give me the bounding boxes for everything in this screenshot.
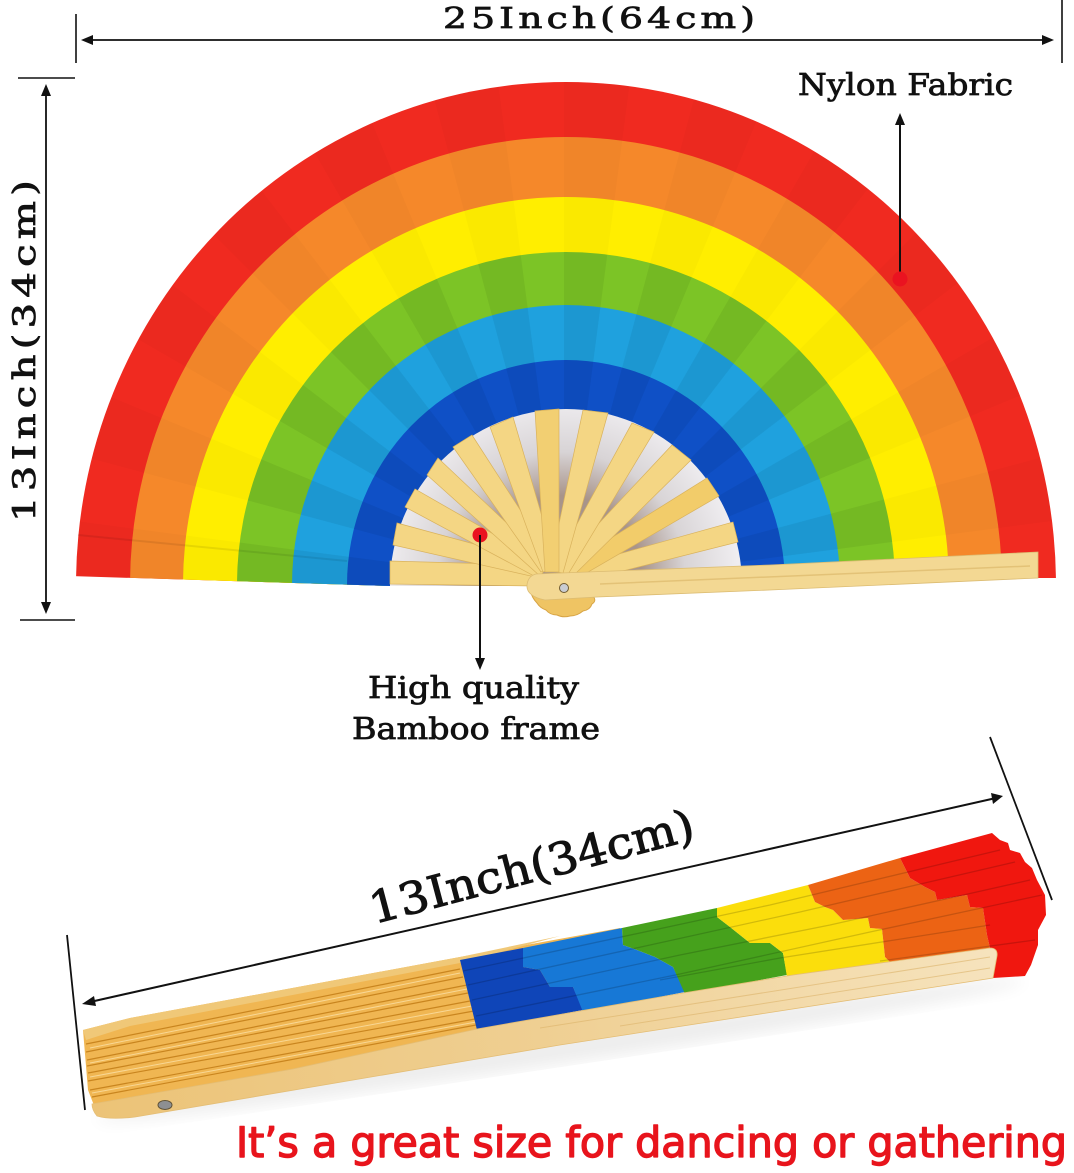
fabric: dark blue: [460, 948, 583, 1030]
dimension: width 25 inch: [76, 0, 1062, 63]
stacked sticks: [83, 928, 620, 1108]
fan fabric rainbow bands: [76, 82, 1056, 586]
fabric: blue: [523, 928, 685, 1012]
callout: nylon fabric: [798, 68, 1013, 286]
dimension: closed length 13 inch: 13Inch(34cm): [364, 800, 700, 935]
hub scalloped end: [530, 590, 595, 617]
rivet: [158, 1100, 172, 1110]
closed rainbow fan: [83, 833, 1046, 1133]
bamboo ribs: [390, 409, 738, 586]
fabric: orange: [808, 858, 990, 962]
fabric: yellow: [717, 885, 890, 977]
fabric: green: [622, 908, 787, 994]
callout: bamboo frame: Bamboo frame: [352, 712, 600, 747]
dimension: width 25 inch: 25Inch(64cm): [443, 1, 755, 35]
fabric: red tip: [900, 833, 1046, 978]
dimension: height 13 inch: 13Inch(34cm): [7, 180, 43, 522]
fabric pleat shadows: [463, 850, 1042, 1016]
callout: bamboo frame: [352, 528, 600, 747]
caption: It’s a great size for dancing or gathering: [236, 1118, 1067, 1167]
dimension: height 13 inch: [7, 78, 75, 620]
callout: bamboo frame: High quality: [368, 671, 579, 706]
dimension: closed length 13 inch: [67, 737, 1052, 1110]
open rainbow fan: [76, 82, 1056, 618]
guard stick handle: [527, 552, 1038, 600]
guard stick: [92, 948, 997, 1118]
rivet: [560, 584, 568, 592]
callout: nylon fabric: Nylon Fabric: [798, 68, 1013, 103]
